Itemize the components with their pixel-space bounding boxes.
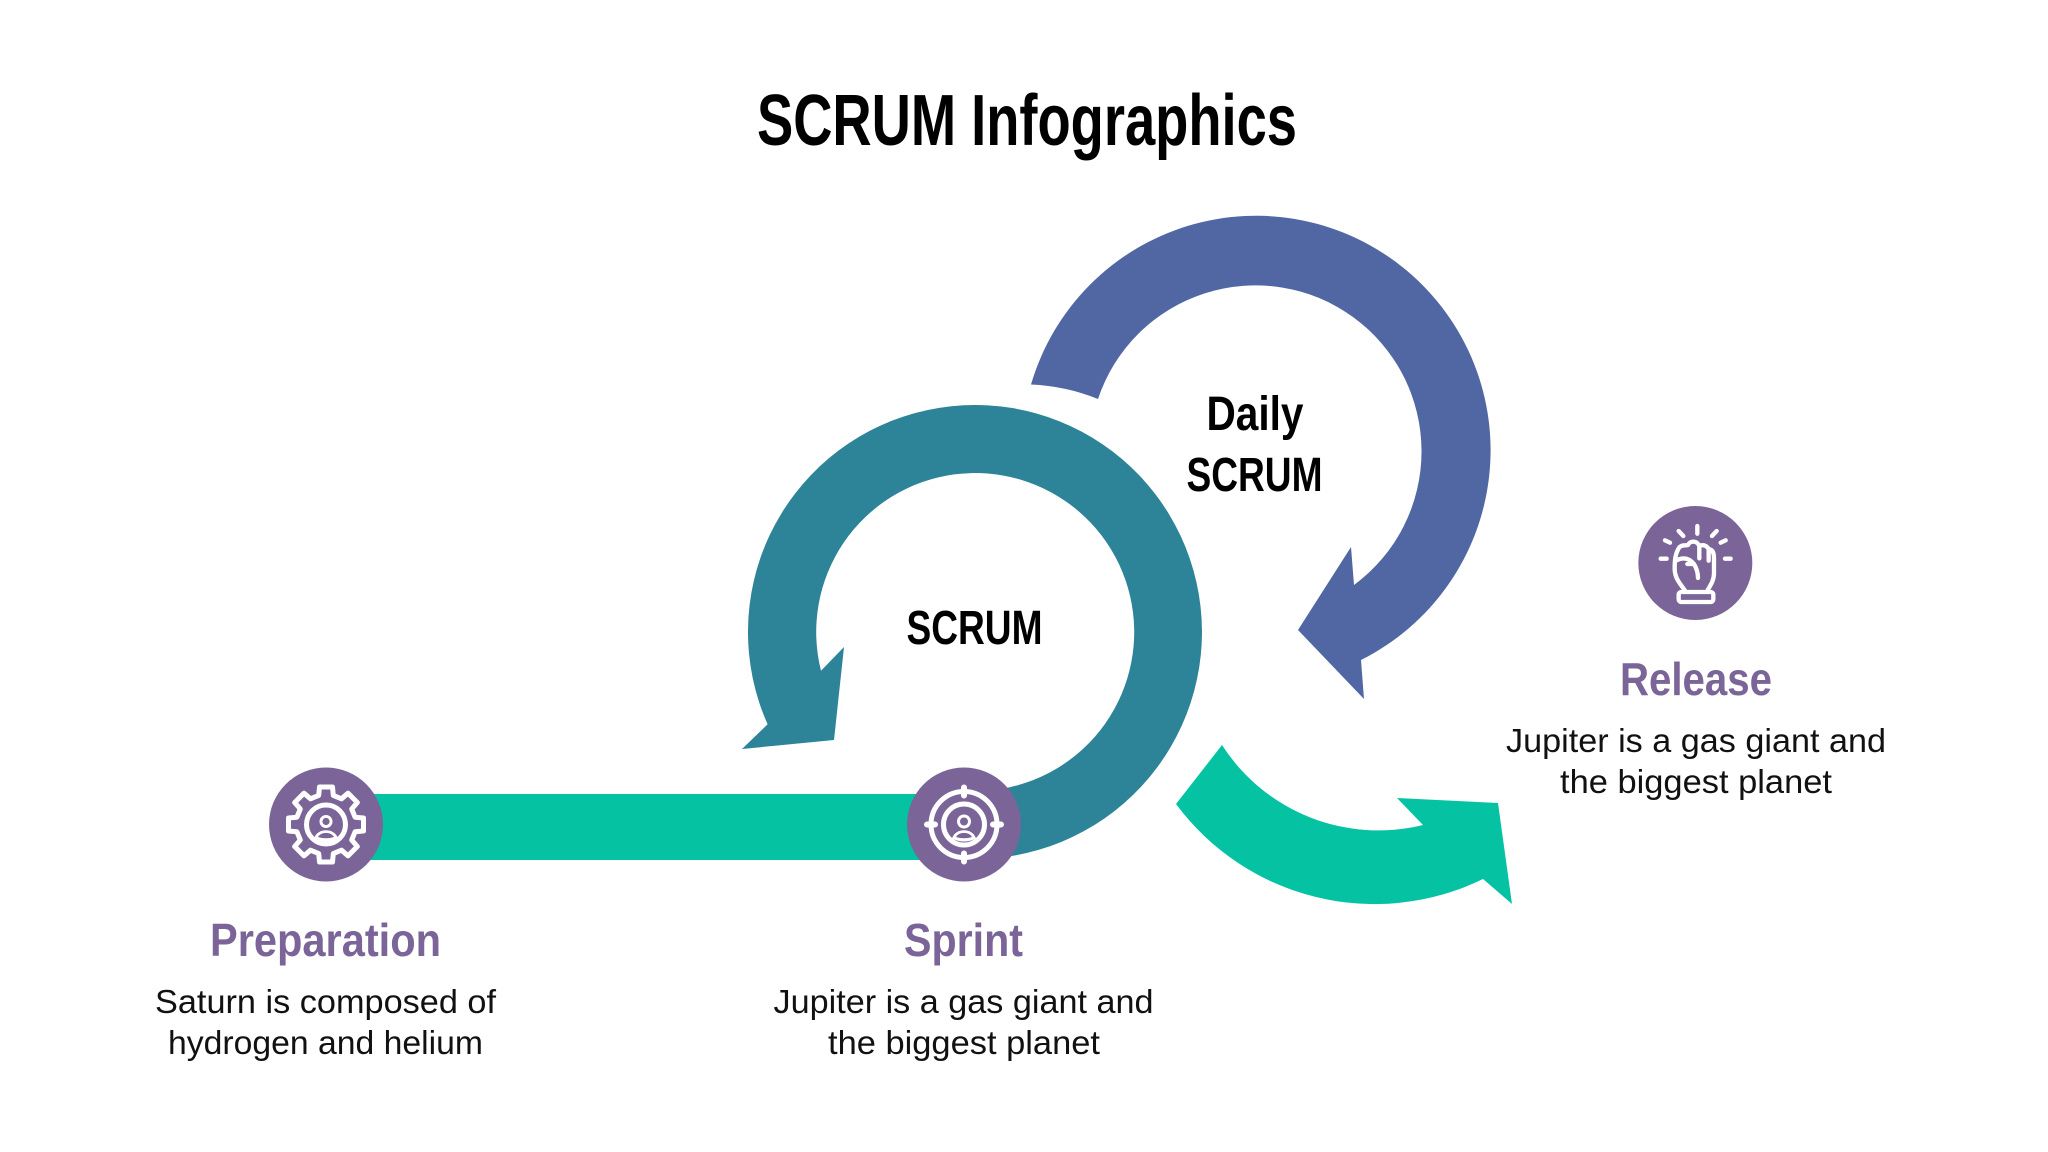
block: preparation text: hydrogen and helium xyxy=(168,1024,483,1061)
icon: preparation gear xyxy=(269,768,383,882)
block: release text xyxy=(1506,653,1886,800)
block: preparation text: Saturn is composed of xyxy=(155,983,497,1020)
arrow: release xyxy=(1176,745,1512,904)
block: sprint text: Sprint xyxy=(904,914,1023,966)
block: release text: the biggest planet xyxy=(1560,763,1832,800)
label: daily scrum: Daily xyxy=(1206,388,1304,441)
block: preparation text: Preparation xyxy=(210,914,441,966)
arrow: daily scrum loop xyxy=(1031,216,1491,699)
bar: preparation to sprint xyxy=(350,794,950,860)
icon: sprint target xyxy=(907,768,1021,882)
title: SCRUM Infographics xyxy=(757,81,1297,161)
block: preparation text xyxy=(155,914,497,1061)
block: sprint text xyxy=(774,914,1154,1061)
arrow: scrum loop xyxy=(742,405,1202,859)
label: scrum: SCRUM xyxy=(906,602,1042,655)
block: sprint text: the biggest planet xyxy=(828,1024,1100,1061)
label: daily scrum: SCRUM xyxy=(1186,449,1322,502)
block: release text: Release xyxy=(1620,653,1772,705)
block: release text: Jupiter is a gas giant and xyxy=(1506,722,1886,759)
label: daily scrum xyxy=(1186,388,1322,502)
block: sprint text: Jupiter is a gas giant and xyxy=(774,983,1154,1020)
icon: release fist xyxy=(1638,506,1752,620)
